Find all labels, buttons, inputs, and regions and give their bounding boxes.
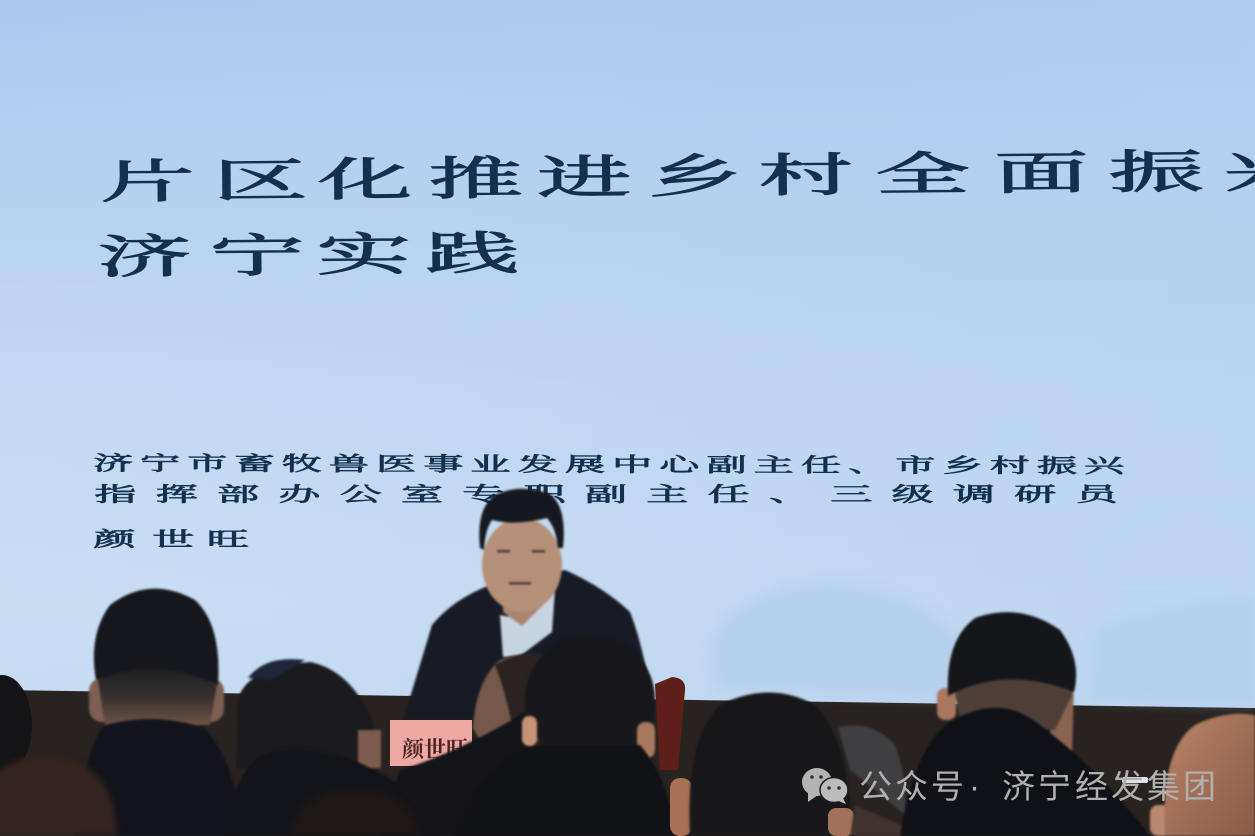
red chair	[655, 677, 685, 770]
speaker hair	[479, 489, 564, 550]
speaker credentials: 济宁市畜牧兽医事业发展中心副主任、市乡村振兴	[93, 452, 1125, 477]
audience: left edge head	[0, 675, 32, 775]
audience: person 4	[455, 634, 675, 836]
speaker neck	[503, 585, 552, 626]
name plate	[390, 720, 472, 766]
screen decoration: faint mountains	[712, 505, 1255, 706]
watermark text: 公众号·济宁经发集团	[859, 768, 1216, 805]
white highlights	[1122, 777, 1148, 783]
audience: person 7	[900, 612, 1150, 836]
audience: person 6	[838, 725, 912, 836]
speaker face	[482, 518, 562, 612]
speaker eyes and mouth	[497, 550, 545, 584]
audience: person 5	[670, 692, 854, 836]
speaker credentials: 指挥部办公室专职副主任、三级调研员	[94, 483, 1120, 506]
speaker shirt	[500, 590, 555, 657]
slide title	[96, 146, 1255, 284]
speaker jacket	[403, 570, 655, 720]
speaker	[403, 489, 655, 720]
watermark	[802, 768, 1216, 805]
slide title: 济宁实践	[97, 229, 520, 284]
audience: bald person	[1150, 714, 1255, 836]
speaker credentials	[93, 452, 1125, 551]
audience: person 1	[75, 589, 240, 836]
speaker credentials: 颜世旺	[93, 528, 249, 551]
audience: person 2	[225, 659, 440, 836]
back wall	[0, 680, 1255, 836]
audience: person 3	[380, 653, 560, 836]
audience: bottom left blurred heads	[0, 757, 420, 836]
name plate: 颜世旺	[402, 737, 468, 762]
icon: wechat	[802, 768, 832, 802]
